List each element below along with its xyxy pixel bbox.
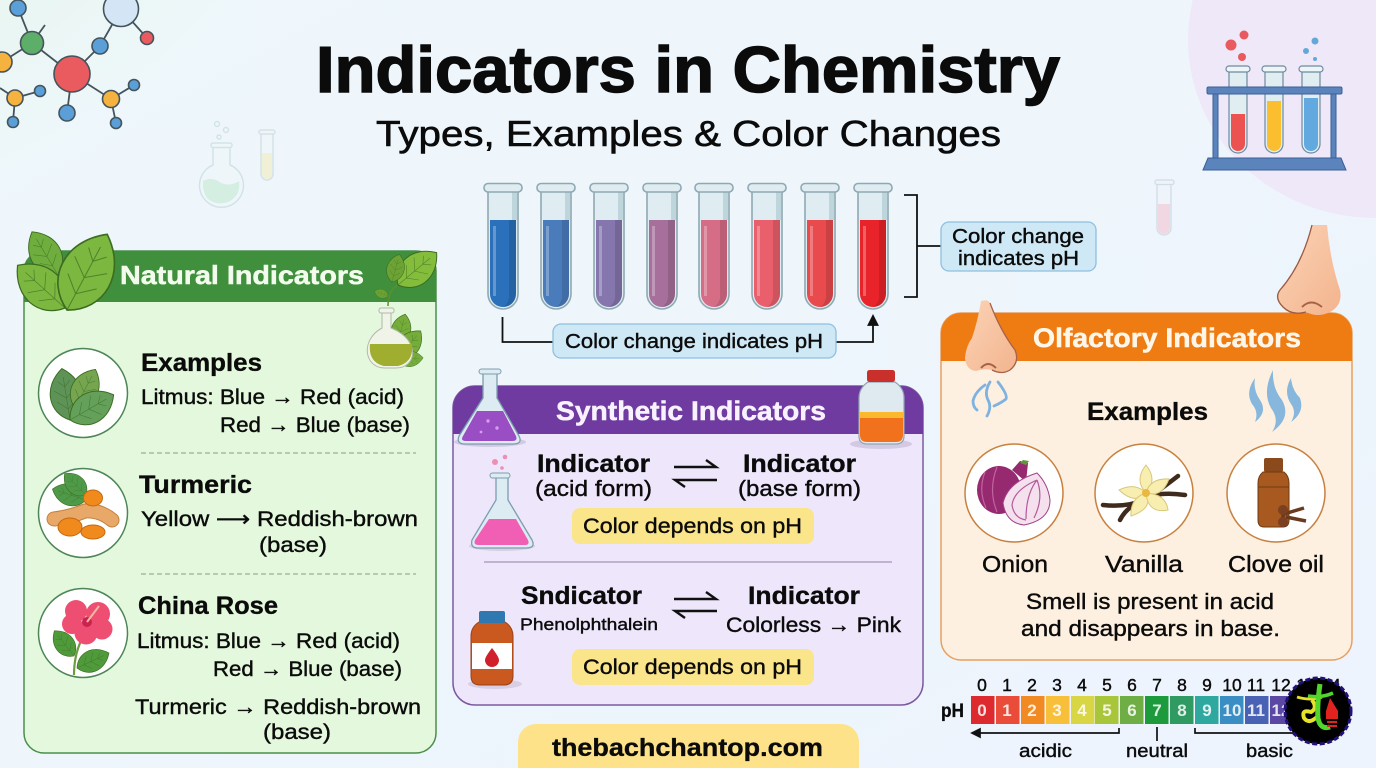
icon: equilibrium arrows	[674, 592, 717, 618]
pH numbers: 13	[1296, 675, 1316, 695]
text: colorless to pink: Colorless → Pink	[726, 613, 901, 637]
pH numbers: 2	[1027, 675, 1037, 695]
text: smell note: Smell is present in acid	[1026, 589, 1274, 614]
panel: synthetic indicators	[453, 369, 923, 705]
icon: smell waves right	[1249, 370, 1301, 432]
icon: sprout and flask	[367, 241, 446, 368]
pH numbers	[977, 675, 1341, 695]
pH numbers: 12	[1271, 675, 1291, 695]
text: turmeric: Turmeric	[139, 471, 252, 499]
pH colour squares: 11	[1247, 701, 1265, 720]
pH numbers: 0	[977, 675, 987, 695]
icon: nose right	[1278, 225, 1341, 315]
labels: example names: Clove oil	[1228, 551, 1324, 577]
pill: color depends on pH	[572, 649, 814, 685]
icon: china rose in circle	[38, 588, 128, 678]
test tube colour series	[484, 184, 892, 309]
pH numbers: 7	[1152, 675, 1162, 695]
pH range labels: basic	[1246, 740, 1293, 761]
pH numbers: 10	[1222, 675, 1242, 695]
text: colorless to pink: Indicator	[748, 582, 860, 610]
text: base form	[738, 450, 861, 501]
pH colour squares: 2	[1027, 701, 1037, 720]
panel: natural indicators	[5, 222, 446, 753]
icon: purple flask	[454, 369, 526, 447]
pill: color depends on pH	[572, 508, 814, 544]
pH colour squares	[971, 696, 1294, 724]
labels: example names: Onion	[982, 551, 1048, 577]
pH numbers: 1	[1002, 675, 1012, 695]
icon: faint flask	[200, 122, 244, 207]
pill: color depends on pH: Color depends on pH	[583, 656, 802, 679]
icon: faint pink tube	[1155, 180, 1174, 235]
pH colour squares: 5	[1102, 701, 1112, 720]
icon: vanilla	[1095, 444, 1193, 542]
text: base form: (base form)	[738, 476, 861, 501]
text: acid form: Indicator	[537, 450, 650, 478]
pH colour squares: 0	[977, 701, 987, 720]
icon: three leaves	[5, 222, 130, 322]
pH numbers: 6	[1127, 675, 1137, 695]
pH axis label: pH	[941, 701, 964, 722]
text: china rose: Litmus: Blue → Red (acid)	[137, 629, 400, 653]
icon: molecule	[0, 0, 154, 128]
text: acid form: (acid form)	[535, 476, 652, 501]
pH numbers: 11	[1247, 675, 1265, 695]
pH colour squares: 4	[1077, 701, 1087, 720]
callout: colour change right: indicates pH	[958, 248, 1079, 270]
text: turmeric	[139, 471, 418, 557]
pH numbers: 14	[1321, 675, 1341, 695]
text: china rose: Turmeric → Reddish-brown	[135, 695, 421, 719]
icon: onion	[965, 444, 1063, 542]
title: Indicators in Chemistry	[316, 33, 1060, 106]
pH range labels: neutral	[1126, 740, 1188, 761]
pH numbers: 9	[1202, 675, 1212, 695]
pH colour squares: 9	[1202, 701, 1212, 720]
callout: colour change right	[941, 222, 1096, 271]
footer: website pill: thebachchantop.com	[552, 734, 823, 762]
pH range markers	[972, 727, 1305, 741]
callout: colour change bottom: Color change indicates pH	[565, 330, 823, 353]
icon: turmeric in circle	[38, 467, 128, 558]
text: turmeric: (base)	[259, 533, 327, 557]
text: smell note: and disappears in base.	[1021, 616, 1280, 641]
arrow: pH connector	[502, 316, 878, 342]
icon: faint test tube	[259, 130, 275, 180]
icon: pink flask	[469, 455, 535, 551]
text: acid form	[535, 450, 652, 501]
text: examples: Examples	[1087, 398, 1208, 426]
pH numbers: 4	[1077, 675, 1087, 695]
pH numbers: 5	[1102, 675, 1112, 695]
pH colour squares: 8	[1177, 701, 1187, 720]
labels: example names: Vanilla	[1105, 551, 1183, 577]
text: colorless to pink	[726, 582, 901, 637]
chart: pH scale	[941, 675, 1341, 761]
pH colour squares: 10	[1223, 701, 1241, 720]
text: china rose: (base)	[263, 720, 331, 744]
pH numbers: 3	[1052, 675, 1062, 695]
pH colour squares: 6	[1127, 701, 1137, 720]
callout: colour change right: Color change	[952, 226, 1084, 248]
icon: nose left	[965, 300, 1017, 372]
text: china rose	[135, 592, 421, 744]
text: china rose: Red → Blue (base)	[213, 657, 402, 681]
icon: litmus leaves in circle	[38, 348, 128, 438]
text: phenolphthalein	[520, 582, 658, 634]
pH colour squares: 1	[1002, 701, 1012, 720]
footer: website pill	[518, 724, 859, 768]
pH colour squares: 7	[1152, 701, 1162, 720]
text: phenolphthalein: Sndicator	[521, 582, 642, 610]
labels: example names	[982, 551, 1324, 577]
text: examples: Examples	[141, 349, 262, 377]
heading: synthetic indicators: Synthetic Indicators	[556, 396, 826, 426]
text: smell note	[1021, 589, 1280, 641]
pH range labels	[1019, 740, 1293, 761]
pH colour squares: 12	[1272, 701, 1290, 720]
icon: smell waves left	[973, 382, 1006, 416]
subtitle: Types, Examples & Color Changes	[376, 113, 1001, 154]
icon: logo badge	[1285, 678, 1351, 744]
callout: colour change bottom	[553, 324, 836, 358]
pH range labels: acidic	[1019, 740, 1072, 761]
pill: color depends on pH: Color depends on pH	[583, 515, 802, 538]
text: examples: Litmus: Blue → Red (acid)	[141, 385, 404, 409]
bracket connector	[904, 195, 941, 297]
heading: olfactory indicators: Olfactory Indicators	[1033, 323, 1301, 353]
text: examples	[141, 349, 410, 437]
icon: test tube rack	[1203, 30, 1346, 170]
text: phenolphthalein: Phenolphthalein	[520, 615, 658, 634]
pH numbers: 8	[1177, 675, 1187, 695]
text: examples: Red → Blue (base)	[220, 413, 410, 437]
icon: clove oil	[1227, 444, 1325, 542]
pH colour squares: 3	[1052, 701, 1062, 720]
text: china rose: China Rose	[138, 592, 278, 620]
heading: natural indicators: Natural Indicators	[120, 260, 364, 290]
icon: equilibrium arrows	[674, 460, 717, 487]
text: turmeric: Yellow ⟶ Reddish-brown	[141, 507, 418, 531]
icon: red drop bottle	[468, 611, 522, 689]
panel: olfactory indicators	[941, 225, 1352, 660]
text: base form: Indicator	[743, 450, 856, 478]
icon: orange bottle	[850, 370, 912, 449]
